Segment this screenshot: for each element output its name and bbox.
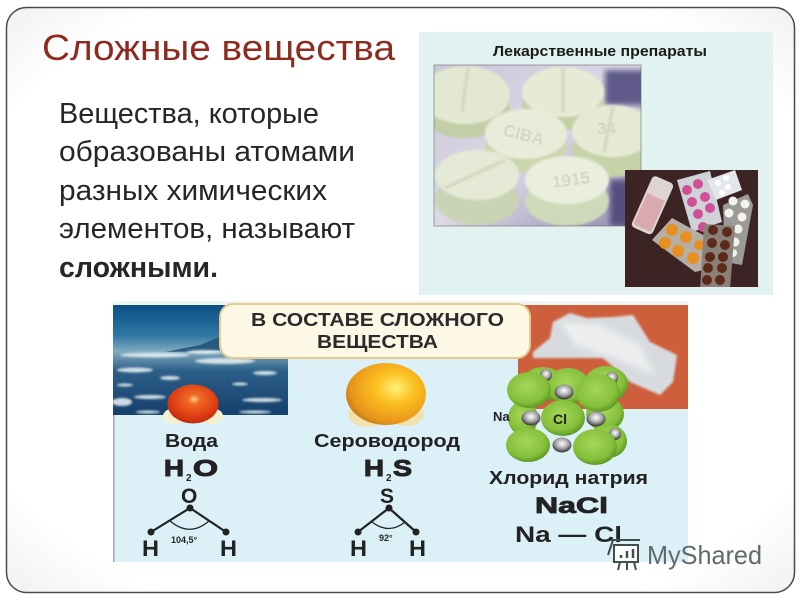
hydrogen sulfide structural formula: H [409, 536, 426, 561]
water structural formula: H [220, 536, 237, 561]
icon: sodium chloride lattice: Na [493, 409, 510, 424]
column: water [142, 384, 237, 561]
water formula [164, 455, 218, 484]
definition text block: элементов, называют [59, 213, 355, 245]
hydrogen sulfide structural formula: H [350, 536, 367, 561]
definition text block: сложными. [59, 252, 218, 284]
sodium chloride name: Хлорид натрия [489, 467, 648, 488]
hydrogen sulfide formula: H [364, 455, 384, 481]
banner: heading [220, 304, 530, 358]
medicines heading: Лекарственные препараты [493, 44, 707, 60]
panel: medicines [419, 32, 773, 295]
definition text block [59, 98, 355, 284]
hydrogen sulfide formula: S [393, 455, 412, 481]
definition text block: разных химических [59, 175, 327, 207]
water formula: 2 [186, 473, 192, 484]
sodium chloride structural formula: Na — Cl [515, 522, 622, 547]
water structural formula: 104,5° [171, 535, 198, 545]
photo: blister packs [625, 170, 758, 290]
definition text block: образованы атомами [59, 136, 355, 168]
banner: heading: В СОСТАВЕ СЛОЖНОГО [251, 309, 504, 330]
hydrogen sulfide structural formula: S [380, 485, 394, 508]
sodium chloride formula: NaCl [535, 493, 608, 518]
hydrogen sulfide structural formula: 92° [379, 533, 393, 543]
hydrogen sulfide formula [364, 455, 412, 484]
hydrogen sulfide structural formula [350, 485, 426, 561]
hydrogen sulfide formula: 2 [386, 473, 392, 484]
title: Сложные вещества [42, 27, 396, 68]
photo: salt crystals on orange [518, 305, 688, 409]
photo: white tablets [434, 65, 641, 226]
icon: hydrogen sulfide molecule [346, 363, 426, 427]
water name: Вода [165, 430, 219, 451]
water structural formula: O [181, 485, 197, 508]
water formula: H [164, 455, 184, 481]
hydrogen sulfide name: Сероводород [314, 430, 460, 451]
photo: icy sea [112, 305, 288, 415]
icon: presentation board [608, 540, 640, 570]
water formula: O [193, 455, 218, 481]
icon: sodium chloride lattice [493, 366, 628, 465]
column: sodium chloride [489, 366, 648, 547]
water structural formula [142, 485, 237, 561]
watermark: MyShared: MyShared [647, 540, 762, 570]
definition text block: Вещества, которые [59, 98, 319, 130]
panel: composition of compound substances [112, 301, 688, 562]
icon: sodium chloride lattice: Cl [553, 411, 567, 427]
photo: white tablets: CIBA [501, 121, 546, 149]
column: hydrogen sulfide [314, 363, 460, 561]
photo: white tablets: 1915 [551, 168, 591, 192]
icon: water molecule [163, 384, 223, 424]
photo: white tablets: 34 [597, 119, 616, 138]
water structural formula: H [142, 536, 159, 561]
banner: heading: ВЕЩЕСТВА [317, 331, 438, 352]
